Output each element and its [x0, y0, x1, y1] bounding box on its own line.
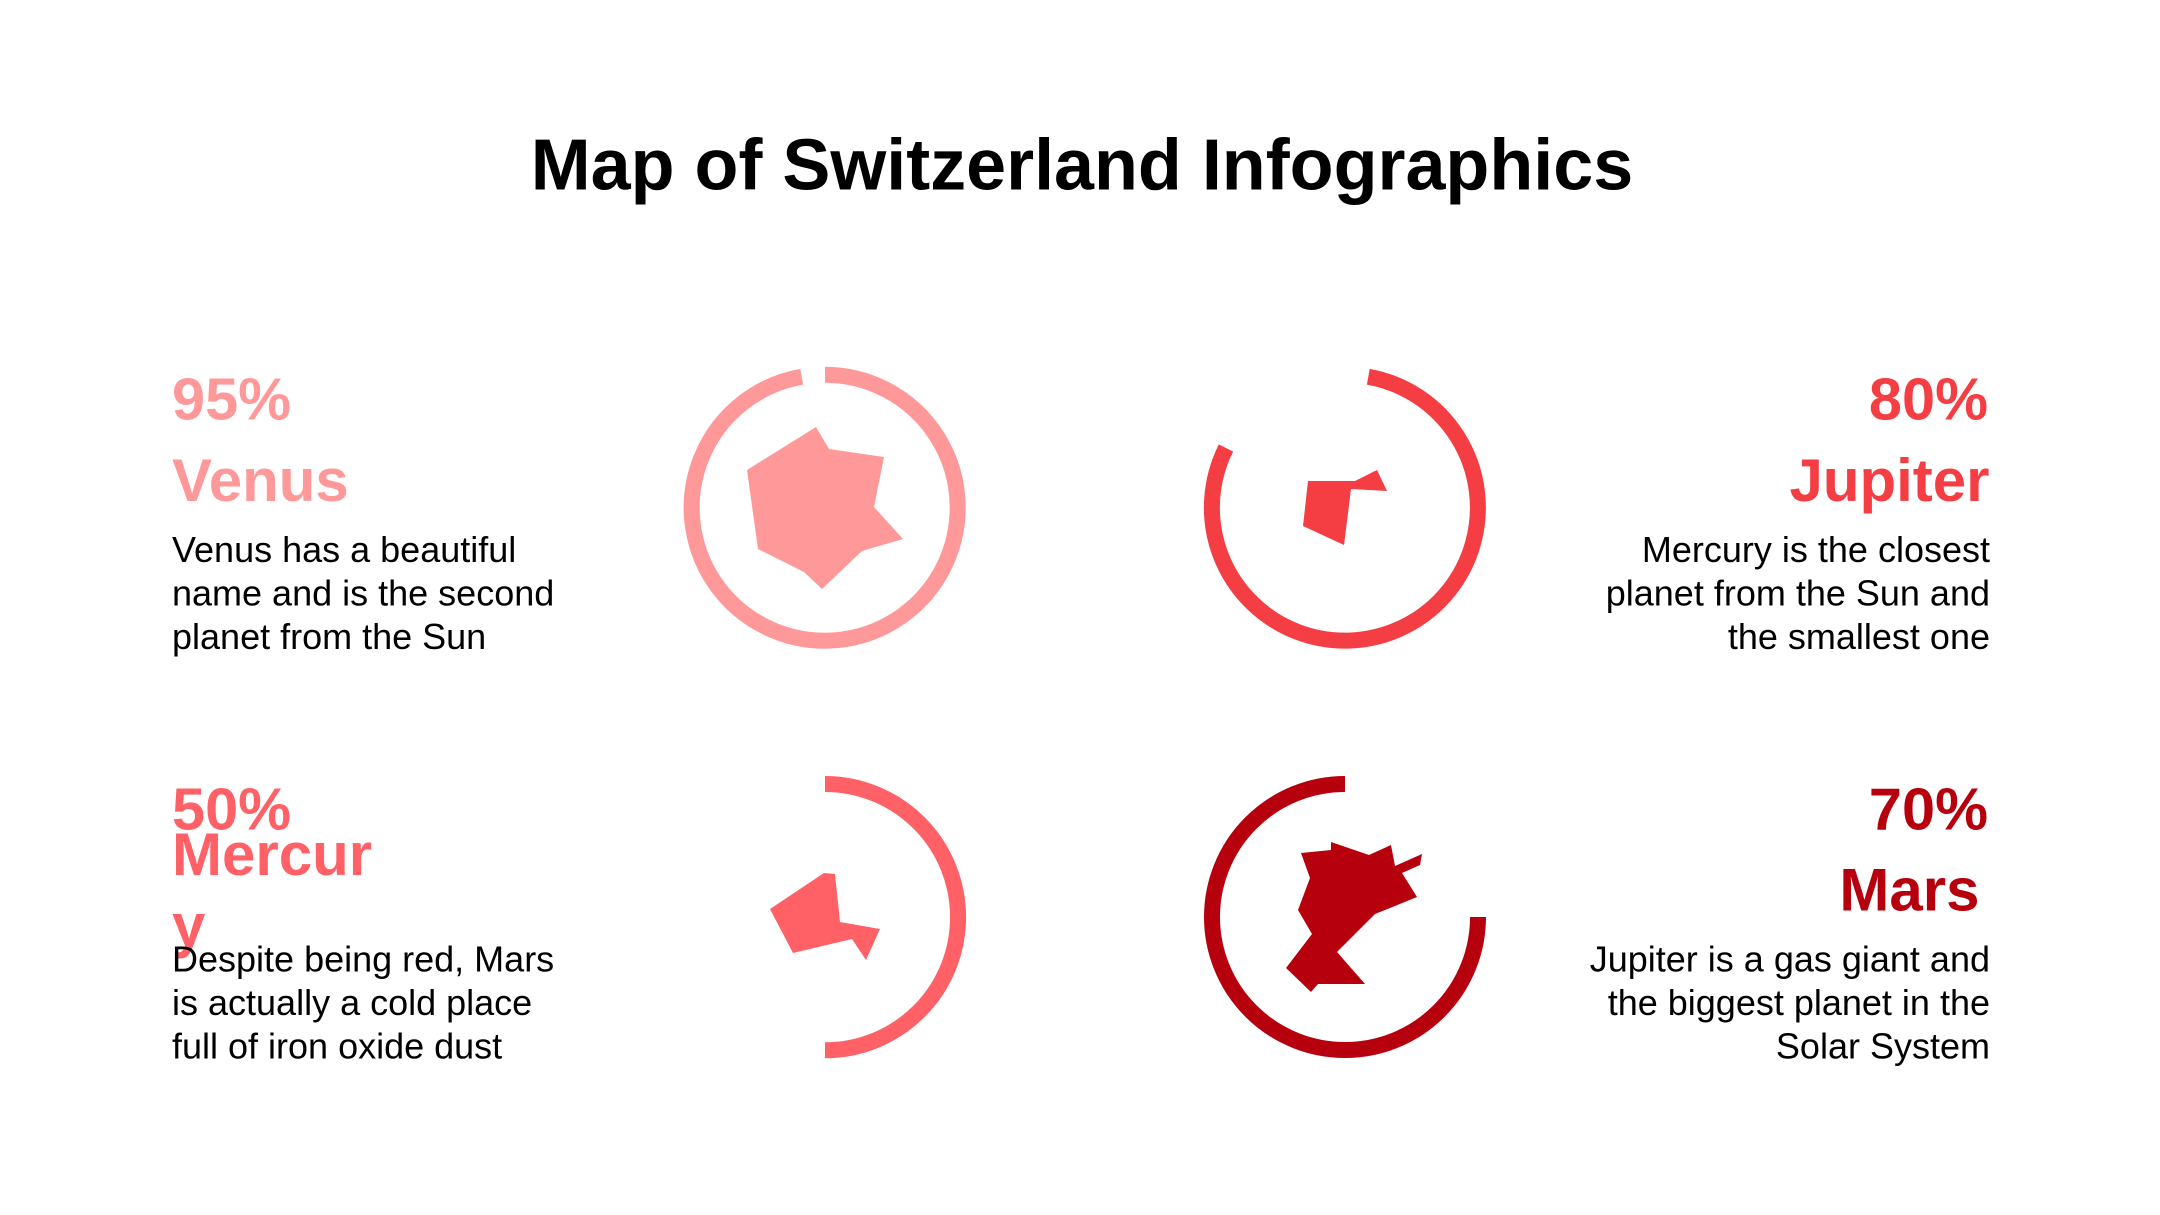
Jupiter description: the smallest one [1728, 616, 1990, 657]
Venus description [172, 529, 554, 657]
panel: Venus text [172, 366, 554, 657]
map: Jupiter [1303, 470, 1387, 545]
Mars percentage: 70% [1869, 776, 1988, 842]
ring: 50% [825, 784, 958, 1050]
panel: Mars text [1590, 776, 1990, 1066]
Mars description [1590, 938, 1990, 1066]
Mercury description: is actually a cold place [172, 982, 532, 1023]
panel: Venus ring and map [692, 375, 958, 641]
Mercury description: full of iron oxide dust [172, 1026, 502, 1066]
Venus name: Venus [172, 447, 349, 514]
Mars description: Jupiter is a gas giant and [1590, 938, 1990, 980]
Mercury name [172, 821, 372, 959]
Mars description: Solar System [1776, 1026, 1990, 1066]
Mercury name: y [172, 892, 206, 959]
Jupiter name: Jupiter [1789, 447, 1990, 514]
panel: Jupiter text [1606, 366, 1990, 657]
title: Map of Switzerland Infographics [531, 126, 1633, 206]
Mercury percentage: 50% [172, 776, 291, 842]
Venus description: name and is the second [172, 572, 554, 614]
ring: 75% [1212, 784, 1478, 1050]
Venus description: Venus has a beautiful [172, 529, 516, 570]
Mercury name: Mercur [172, 821, 372, 888]
Jupiter description: Mercury is the closest [1642, 529, 1990, 570]
Mercury description: Despite being red, Mars [172, 938, 554, 980]
map: Venus [747, 427, 903, 589]
panel: Mercury ring and map [770, 784, 958, 1050]
panel: Jupiter ring and map [1212, 377, 1478, 641]
ring: 95% [692, 375, 958, 641]
Mars name: Mars [1839, 856, 1980, 924]
panel: Mercury text [172, 776, 554, 1066]
panel: Mars ring and map [1212, 784, 1478, 1050]
Mercury description [172, 938, 554, 1066]
map: Mercury [770, 873, 880, 960]
Mars description: the biggest planet in the [1608, 982, 1990, 1023]
map: Mars [1286, 842, 1422, 992]
Jupiter description: planet from the Sun and [1606, 572, 1990, 614]
Jupiter description [1606, 529, 1990, 657]
Venus description: planet from the Sun [172, 616, 486, 657]
ring: 80% [1212, 377, 1478, 641]
Jupiter percentage: 80% [1869, 366, 1988, 432]
Venus percentage: 95% [172, 366, 291, 432]
